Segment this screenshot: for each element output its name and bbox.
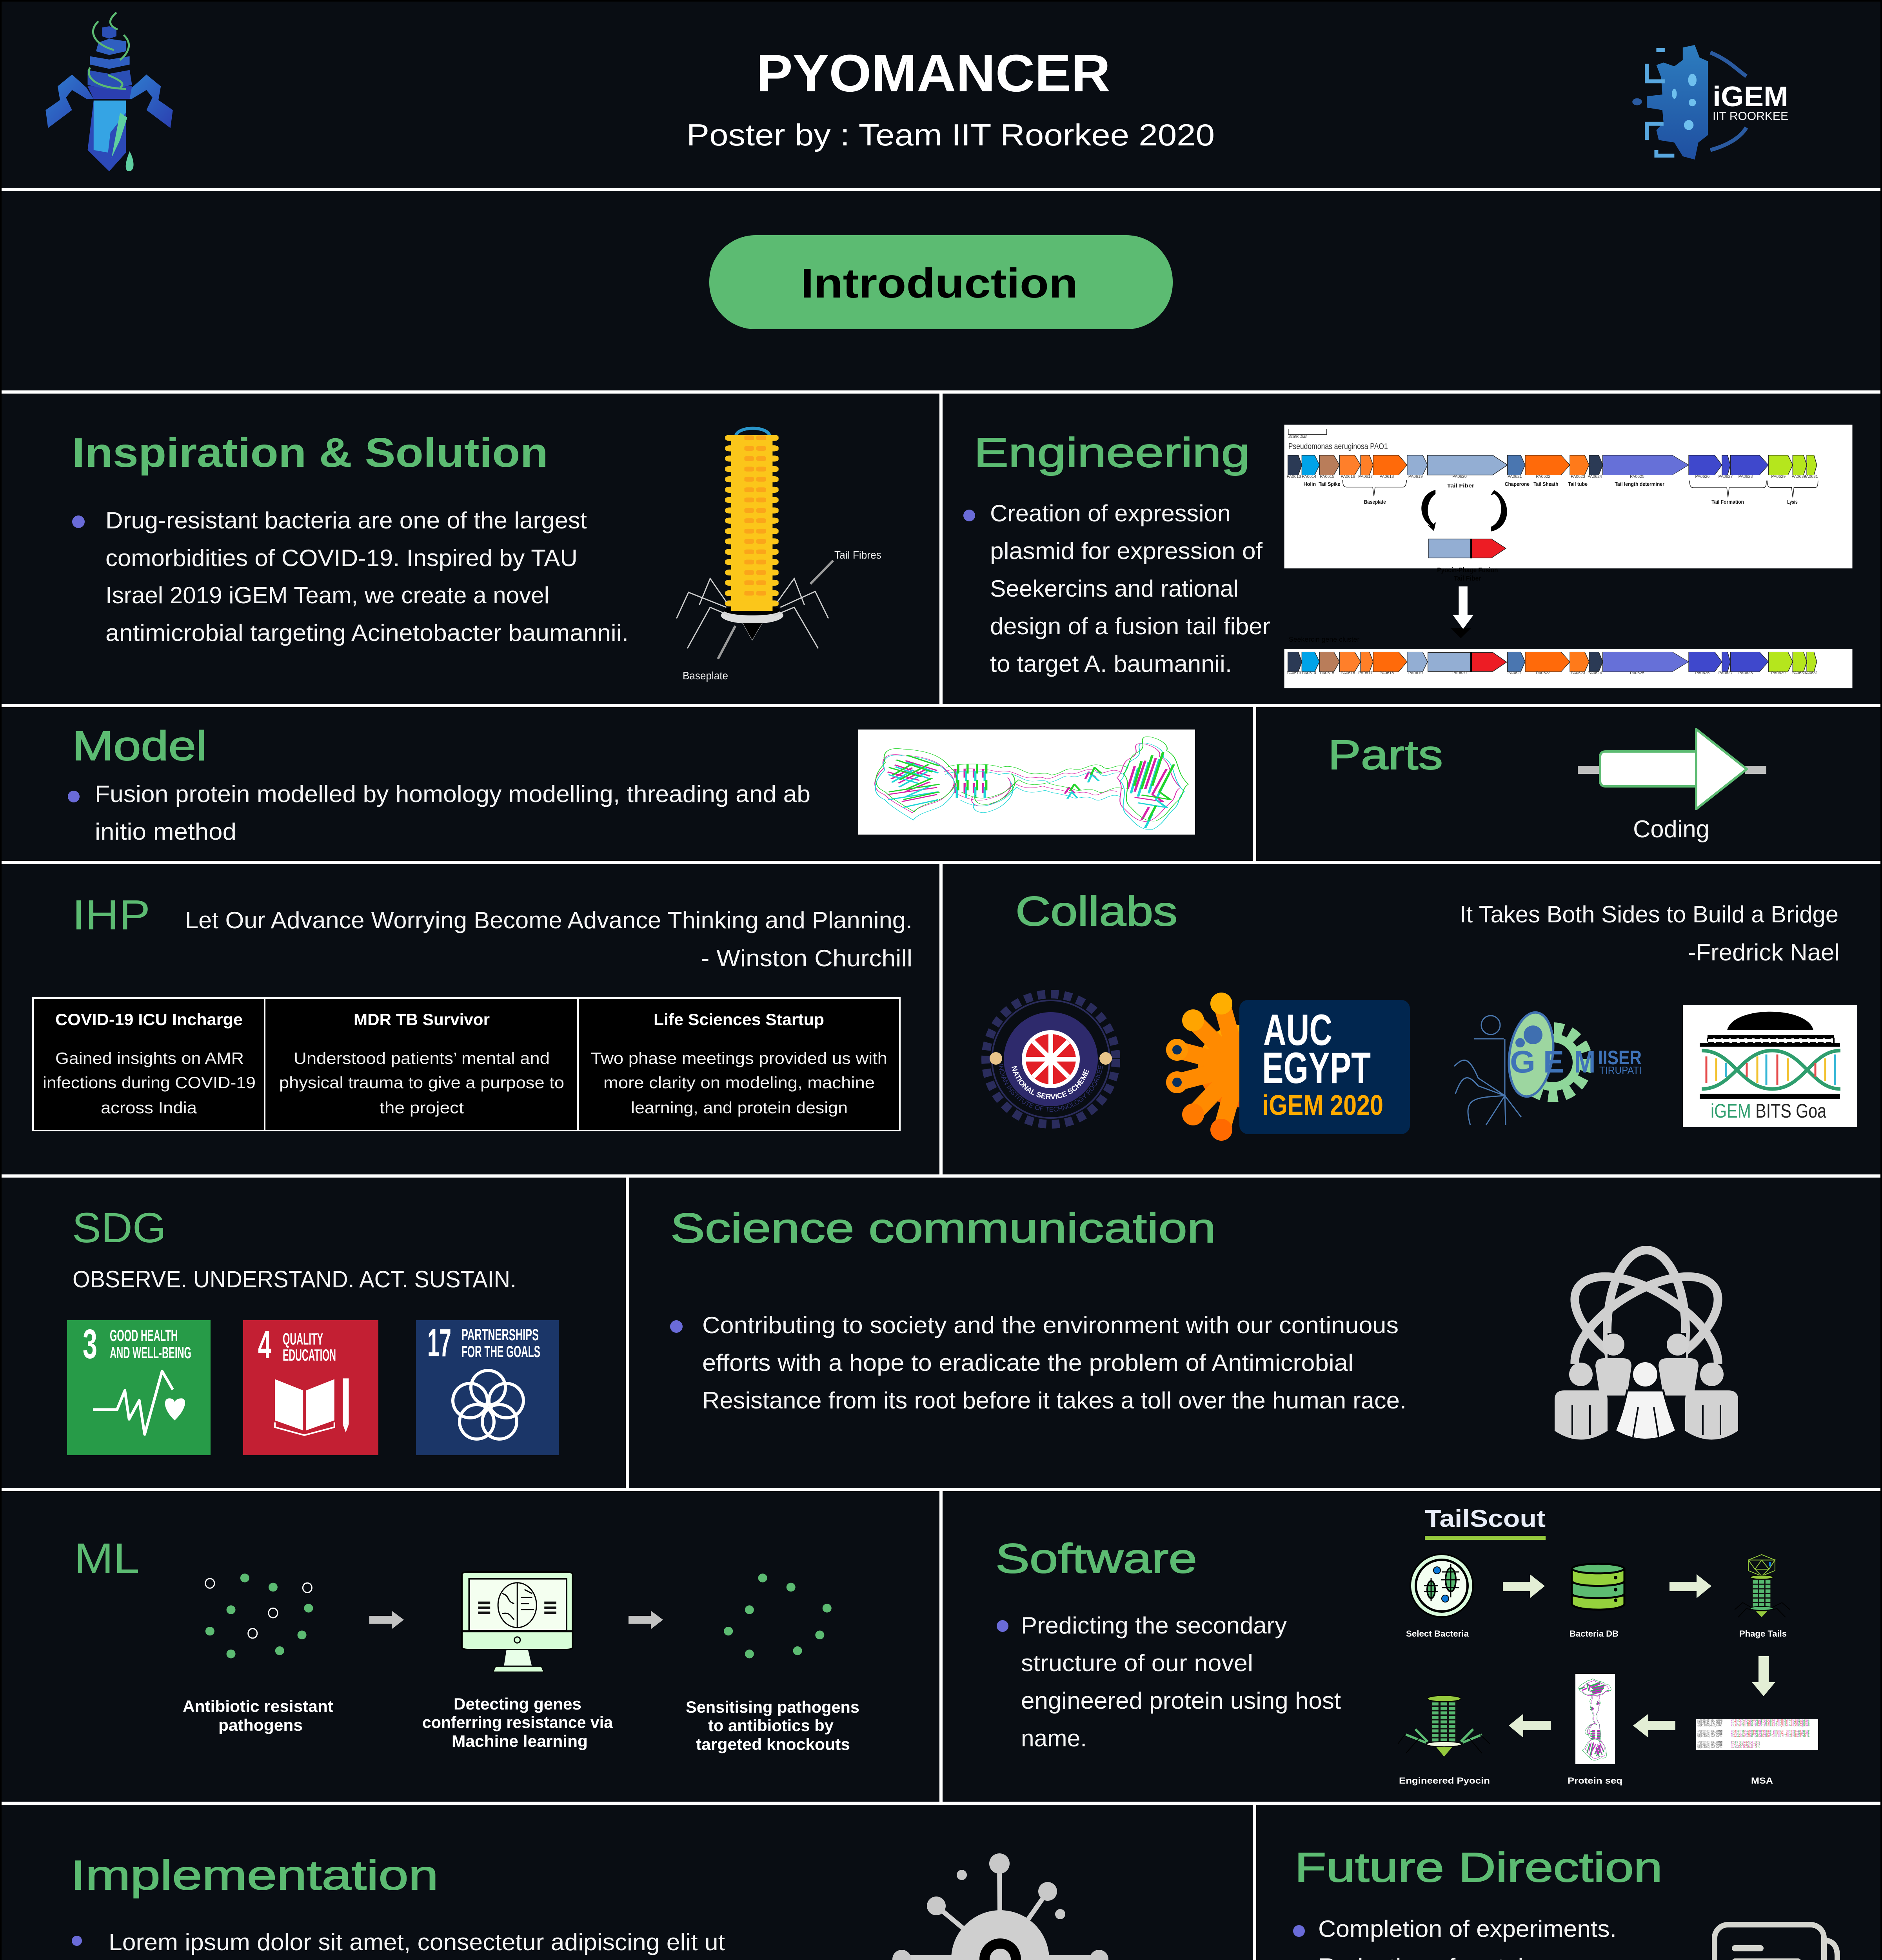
step: resistant pathogens: pathogens (218, 1716, 303, 1734)
diagram: gene cluster with fusion tail fiber: PA0630 (1791, 671, 1806, 675)
quote (1460, 901, 1840, 965)
step: detecting genes with monitor: conferring resistance via (422, 1713, 613, 1731)
panel: model (2, 707, 1253, 861)
table: stakeholders: more clarity on modeling, machine (603, 1073, 875, 1092)
bullet text (72, 507, 629, 646)
diagram: gene cluster with fusion tail fiber: PA0615 (1320, 474, 1334, 479)
logo: iGEM IISER Tirupati (1454, 1009, 1642, 1125)
title: PYOMANCER (756, 44, 1110, 103)
diagram: gene cluster with fusion tail fiber: PA0626 (1695, 474, 1709, 479)
image: MSA alignment: sp|P01942|HBA_MOUSE (1697, 1732, 1722, 1736)
pipeline labels (1399, 1629, 1787, 1786)
logo: iGEM BITS Goa (1683, 1005, 1857, 1127)
icon: database (1572, 1564, 1624, 1610)
logo: iGEM IISER Tirupati: TIRUPATI (1599, 1064, 1642, 1076)
TailScout heading (1425, 1505, 1546, 1540)
arrow (1503, 1574, 1545, 1598)
bullet text: engineered protein using host (1021, 1688, 1341, 1714)
diagram: TailScout pipeline (1398, 1505, 1818, 1786)
icon: people with atom (1555, 1250, 1738, 1439)
arrow (1633, 1714, 1675, 1738)
heading: Engineering (974, 430, 1250, 476)
panel: future direction (1256, 1805, 1880, 1960)
diagram: gene cluster with fusion tail fiber: PA0614 (1302, 671, 1316, 675)
panel: integrated human practices (2, 864, 939, 1174)
logo: iGEM IISER Tirupati: M (1574, 1044, 1595, 1079)
diagram: gene cluster with fusion tail fiber: PA0629 (1771, 474, 1786, 479)
heading: Parts (1328, 732, 1443, 778)
tagline: OBSERVE. UNDERSTAND. ACT. SUSTAIN. (73, 1266, 516, 1292)
icon: petri dish (1410, 1554, 1473, 1617)
illustration: phage tail: Tail Fibres (834, 549, 881, 561)
panel: software (943, 1491, 1880, 1802)
heading: Software (995, 1535, 1197, 1582)
icon: iGEM IIT Roorkee logo (1632, 45, 1788, 160)
diagram: gene cluster with fusion tail fiber: PA0631 (1804, 671, 1818, 675)
diagram: gene cluster with fusion tail fiber: PA0625 (1630, 671, 1644, 675)
tile: SDG 4: QUALITY (283, 1330, 323, 1348)
image: MSA alignment: sp|P01942|HBA_MOUSE (1697, 1722, 1722, 1725)
arrow (369, 1611, 404, 1629)
bullet list: Lorem ipsum dolor sit amet, consectetur adipiscing elit ut (109, 1929, 725, 1955)
pipeline labels: MSA (1751, 1776, 1773, 1786)
diagram: gene cluster with fusion tail fiber: Tail tube (1568, 481, 1588, 487)
tile: SDG 4: EDUCATION (283, 1346, 336, 1364)
image: MSA alignment: sp|P13786|HBAZ_CAPHI (1697, 1746, 1722, 1749)
step: sensitising pathogens: to antibiotics by (708, 1716, 834, 1735)
panel: inspiration and solution (2, 394, 939, 704)
step: resistant pathogens: Antibiotic resistant (183, 1697, 333, 1715)
diagram: gene cluster with fusion tail fiber: PA0620 (1452, 474, 1467, 479)
image: MSA alignment: sp|P13786|HBAZ_CAPHI (1697, 1724, 1722, 1728)
pipeline labels: Protein seq (1568, 1776, 1622, 1786)
diagram: gene cluster with fusion tail fiber: PA0621 (1508, 671, 1522, 675)
bullet text: Predicting the secondary (1021, 1612, 1287, 1639)
pipeline labels: Select Bacteria (1406, 1629, 1469, 1639)
step: sensitising pathogens: targeted knockouts (696, 1735, 850, 1753)
label: Coding (1633, 816, 1709, 843)
bullet text (1293, 1916, 1617, 1960)
panel: introduction banner (2, 191, 1880, 390)
image: MSA alignment: sp|P69905|HBA_HUMAN (1697, 1719, 1722, 1723)
tile: SDG 3: 3 (83, 1321, 97, 1367)
diagram: gene cluster with fusion tail fiber: PA0630 (1791, 474, 1806, 479)
step: sensitising pathogens: Sensitising pathogens (686, 1698, 859, 1716)
diagram: gene cluster with fusion tail fiber: PA0628 (1738, 474, 1753, 479)
arrow (1752, 1656, 1775, 1696)
bullet text: structure of our novel (1021, 1650, 1253, 1676)
bullet text: Fusion protein modelled by homology modelling, threading and ab (95, 781, 810, 807)
diagram: gene cluster with fusion tail fiber: PA0622 (1536, 671, 1550, 675)
icon: magnifier with network (892, 1853, 1108, 1960)
quote: Let Our Advance Worrying Become Advance Thinking and Planning. (185, 907, 912, 933)
diagram: gene cluster with fusion tail fiber: PA0613 (1287, 671, 1301, 675)
table: stakeholders: the project (380, 1098, 464, 1117)
image: fusion protein model (858, 730, 1195, 835)
tile: SDG 3: AND WELL-BEING (110, 1343, 191, 1362)
illustration: phage tail: Baseplate (683, 670, 728, 682)
panel: collaborations (943, 864, 1880, 1174)
bullet text: Resistance from its root before it takes a toll over the human race. (702, 1387, 1406, 1414)
table: stakeholders: physical trauma to give a purpose to (279, 1073, 564, 1092)
table: stakeholders: infections during COVID-19 (43, 1073, 256, 1092)
diagram: gene cluster with fusion tail fiber: PA0627 (1719, 671, 1733, 675)
image: MSA alignment: AVHASLDKFLASVSTVLTSKYR (1731, 1743, 1760, 1747)
quote: -Fredrick Nael (1688, 939, 1840, 965)
tile: SDG 3 (67, 1320, 211, 1455)
introduction label: Introduction (801, 260, 1078, 307)
quote (185, 907, 912, 971)
diagram: gene cluster with fusion tail fiber: PA0615 (1320, 671, 1334, 675)
table: stakeholders: MDR TB Survivor (354, 1010, 490, 1029)
table: stakeholders: Understood patients’ mental and (294, 1049, 550, 1067)
table: stakeholders: Gained insights on AMR (55, 1049, 244, 1067)
table: stakeholders: COVID-19 ICU Incharge (55, 1010, 243, 1029)
bullet text (670, 1312, 1406, 1414)
image: MSA alignment: DAHAAWDKFLSIVSGVLTEKYR (1731, 1746, 1760, 1749)
bullet text: to target A. baumannii. (990, 651, 1232, 677)
panel: implementation (2, 1805, 1253, 1960)
step: sensitising pathogens (686, 1573, 859, 1753)
pipeline labels: Bacteria DB (1570, 1629, 1619, 1639)
heading: Science communication (670, 1205, 1216, 1251)
subtitle: Poster by : Team IIT Roorkee 2020 (687, 118, 1215, 152)
logo: iGEM BITS Goa: iGEM BITS Goa (1711, 1100, 1826, 1122)
diagram: gene cluster with fusion tail fiber: PA0627 (1719, 474, 1733, 479)
diagram: gene cluster with fusion tail fiber: PA0623 (1571, 474, 1585, 479)
diagram: gene cluster with fusion tail fiber: Tail Fiber (1454, 575, 1481, 582)
diagram: gene cluster with fusion tail fiber: Tail Formation (1711, 499, 1744, 505)
logo: National Service Scheme: NATIONAL SERVICE SCHEME (1010, 1065, 1091, 1101)
step: detecting genes with monitor: Detecting genes (454, 1695, 581, 1713)
panel: sustainable development goals (2, 1178, 626, 1488)
step: detecting genes with monitor: Machine learning (452, 1732, 588, 1750)
tile: SDG 17: FOR THE GOALS (461, 1342, 540, 1361)
diagram: gene cluster with fusion tail fiber: PA0625 (1630, 474, 1644, 479)
diagram: gene cluster with fusion tail fiber: PA0613 (1287, 474, 1301, 479)
diagram: gene cluster with fusion tail fiber: PA0614 (1302, 474, 1316, 479)
diagram: gene cluster with fusion tail fiber: Seekercin gene cluster (1289, 636, 1360, 643)
bullet text: Seekercins and rational (990, 575, 1239, 602)
bullet text: initio method (95, 818, 236, 845)
image: MSA alignment: MVLSPADKTNVKAAWGKVGAHAGEYGAEALERMFLSFPTTKTYFPHFDLSHGSAQVKGHG (1731, 1719, 1809, 1723)
introduction pill (709, 235, 1173, 329)
heading: Future Direction (1295, 1844, 1662, 1891)
diagram: gene cluster with fusion tail fiber: PA0624 (1588, 671, 1602, 675)
panel: header (2, 2, 1880, 188)
logo: AUC Egypt iGEM 2020: AUC (1263, 1005, 1332, 1054)
diagram: gene cluster with fusion tail fiber: Holin (1303, 481, 1316, 487)
diagram: gene cluster with fusion tail fiber: Lysis (1787, 499, 1798, 505)
tile: SDG 17: PARTNERSHIPS (461, 1325, 539, 1344)
quote: It Takes Both Sides to Build a Bridge (1460, 901, 1838, 927)
image: MSA alignment: MVLSGEDKSNIKAAWGKIGGHGAEYGAEALERMFASFPTTKTYFPHFDVSHGSAQVKGHG (1731, 1722, 1809, 1725)
logo: iGEM IISER Tirupati: IISER (1598, 1047, 1642, 1069)
heading: Implementation (71, 1852, 438, 1898)
bullet text: efforts with a hope to eradicate the problem of Antimicrobial (702, 1350, 1353, 1376)
diagram: gene cluster with fusion tail fiber: PA0616 (1341, 671, 1355, 675)
diagram: gene cluster with fusion tail fiber: PA0619 (1408, 671, 1423, 675)
heading: SDG (72, 1204, 166, 1251)
heading: Inspiration & Solution (72, 430, 548, 476)
logo: AUC Egypt iGEM 2020 (1166, 993, 1410, 1141)
image: MSA alignment: AVHASLDKFLASVSTVLTSKYR (1731, 1741, 1760, 1744)
table: stakeholders: Life Sciences Startup (654, 1010, 824, 1029)
panel: science communication (629, 1178, 1880, 1488)
diagram: gene cluster with fusion tail fiber: Tail Sheath (1533, 481, 1558, 487)
icon: engineered pyocin (1398, 1696, 1490, 1757)
TailScout heading: TailScout (1425, 1505, 1546, 1532)
heading: Collabs (1015, 888, 1177, 935)
diagram: gene cluster with fusion tail fiber: Scale: 1kB (1288, 434, 1307, 439)
tile: SDG 3: GOOD HEALTH (110, 1326, 178, 1345)
panel: machine learning (2, 1491, 939, 1802)
tile: SDG 17 (416, 1320, 559, 1455)
image: MSA alignment: MSLTRTERTIILSLWSKISTQADVIGTETLERLFSCYPQAKTYFPHFDLHSGSAQLRAHG (1731, 1724, 1809, 1728)
bullet text: Creation of expression (990, 500, 1231, 526)
diagram: gene cluster with fusion tail fiber: PA0617 (1358, 671, 1373, 675)
bullet text: name. (1021, 1725, 1087, 1751)
diagram: gene cluster with fusion tail fiber: PA0616 (1341, 474, 1355, 479)
diagram: gene cluster with fusion tail fiber: Tail Fiber (1447, 483, 1474, 489)
icon: Pyomancer logo (45, 13, 173, 171)
heading: IHP (72, 891, 150, 938)
logo: iGEM IISER Tirupati: G (1510, 1044, 1535, 1079)
logo: National Service Scheme (986, 994, 1116, 1124)
image: MSA alignment: KKVADALTNAVAHVDDMPNALSALSDLHAHKLRVDPVNFKLLSHCLLVTLAAHLPAEFTP (1731, 1730, 1809, 1733)
image: MSA alignment (1696, 1719, 1818, 1750)
bullet text (963, 500, 1270, 677)
diagram: gene cluster with fusion tail fiber: Pyocin-Phage Fusion (1437, 566, 1498, 574)
image: MSA alignment: SKVVAAVGDAVKSIDNVTGALSALSELHAYVLRVDPVNFKFLSHCLLVTLASHFPADFTA (1731, 1735, 1809, 1738)
icon: iGEM IIT Roorkee logo: IIT ROORKEE (1713, 110, 1788, 123)
logo: National Service Scheme: INDIAN INSTITUTE OF TECHNOLOGY ROORKEE (997, 1063, 1104, 1113)
bullet text: design of a fusion tail fiber (990, 613, 1270, 639)
bullet list (72, 1929, 824, 1960)
bullet text (68, 781, 810, 845)
icon: phage tail (1735, 1555, 1790, 1617)
diagram: gene cluster with fusion tail fiber: PA0623 (1571, 671, 1585, 675)
quote: - Winston Churchill (701, 945, 912, 971)
logo: iGEM IISER Tirupati: E (1543, 1044, 1564, 1079)
diagram: gene cluster with fusion tail fiber: PA0631 (1804, 474, 1818, 479)
bullet text: plasmid for expression of (990, 538, 1263, 564)
tile: SDG 17: 17 (427, 1321, 451, 1365)
pipeline labels: Engineered Pyocin (1399, 1776, 1490, 1786)
image: MSA alignment: sp|P01942|HBA_MOUSE (1697, 1743, 1722, 1747)
image: protein sequence structure (1575, 1674, 1615, 1764)
tile: SDG 4: 4 (258, 1323, 271, 1367)
bullet text: Contributing to society and the environment with our continuous (702, 1312, 1399, 1338)
diagram: gene cluster with fusion tail fiber: Baseplate (1364, 499, 1386, 505)
bullet text: antimicrobial targeting Acinetobacter baumannii. (105, 620, 629, 646)
diagram: gene cluster with fusion tail fiber: Tail length determiner (1615, 481, 1664, 487)
step: resistant pathogens (183, 1573, 333, 1734)
diagram: gene cluster with fusion tail fiber: PA0629 (1771, 671, 1786, 675)
bullet text: comorbidities of COVID-19. Inspired by TAU (105, 545, 578, 571)
diagram: gene cluster with fusion tail fiber: Tail Spike (1319, 481, 1340, 487)
image: MSA alignment: sp|P13786|HBAZ_CAPHI (1697, 1735, 1722, 1738)
image: MSA alignment: KKVADALASAAGHLDDLPGALSALSDLHAHKLRVDPVNFKLLSHCLLVTLASHHPADFTP (1731, 1732, 1809, 1736)
diagram: gene cluster with fusion tail fiber (1284, 425, 1852, 688)
diagram: gene cluster with fusion tail fiber: PA0628 (1738, 671, 1753, 675)
diagram: gene cluster with fusion tail fiber: PA0624 (1588, 474, 1602, 479)
icon: document with clock (1715, 1925, 1837, 1960)
diagram: gene cluster with fusion tail fiber: PA0620 (1452, 671, 1467, 675)
diagram: gene cluster with fusion tail fiber: PA0617 (1358, 474, 1373, 479)
bullet text (997, 1612, 1341, 1751)
bullet text: Completion of experiments. (1318, 1916, 1617, 1942)
logo: AUC Egypt iGEM 2020: EGYPT (1262, 1044, 1371, 1093)
panel: engineering (943, 394, 1880, 704)
diagram: gene cluster with fusion tail fiber: Pseudomonas aeruginosa PAO1 (1288, 442, 1388, 451)
illustration: phage tail (676, 428, 881, 682)
arrow (1669, 1574, 1711, 1598)
icon: coding sequence arrow (1578, 729, 1766, 809)
diagram: gene cluster with fusion tail fiber: PA0621 (1508, 474, 1522, 479)
diagram: gene cluster with fusion tail fiber: PA0618 (1379, 671, 1394, 675)
image: MSA alignment: sp|P69905|HBA_HUMAN (1697, 1741, 1722, 1744)
icon: iGEM IIT Roorkee logo: iGEM (1713, 81, 1788, 113)
table: stakeholders (33, 998, 900, 1131)
logo: AUC Egypt iGEM 2020: iGEM 2020 (1262, 1090, 1383, 1121)
tile: SDG 4 (243, 1320, 378, 1455)
table: stakeholders: Two phase meetings provided us with (591, 1049, 887, 1067)
arrow (1509, 1714, 1551, 1738)
diagram: gene cluster with fusion tail fiber: Chaperone (1505, 481, 1530, 487)
bullet text: Israel 2019 iGEM Team, we create a novel (105, 582, 549, 608)
diagram: gene cluster with fusion tail fiber: PA0618 (1379, 474, 1394, 479)
diagram: gene cluster with fusion tail fiber: PA0622 (1536, 474, 1550, 479)
table: stakeholders: learning, and protein design (631, 1098, 848, 1117)
diagram: gene cluster with fusion tail fiber: PA0626 (1695, 671, 1709, 675)
pipeline labels: Phage Tails (1739, 1629, 1787, 1639)
arrow (629, 1611, 663, 1629)
heading: ML (74, 1534, 140, 1582)
table: stakeholders: across India (101, 1098, 197, 1117)
panel: parts (1256, 707, 1880, 861)
diagram: gene cluster with fusion tail fiber: PA0619 (1408, 474, 1423, 479)
step: detecting genes with monitor (422, 1572, 613, 1750)
bullet text: Drug-resistant bacteria are one of the largest (105, 507, 587, 534)
heading: Model (72, 723, 207, 769)
image: MSA alignment: sp|P69905|HBA_HUMAN (1697, 1730, 1722, 1733)
